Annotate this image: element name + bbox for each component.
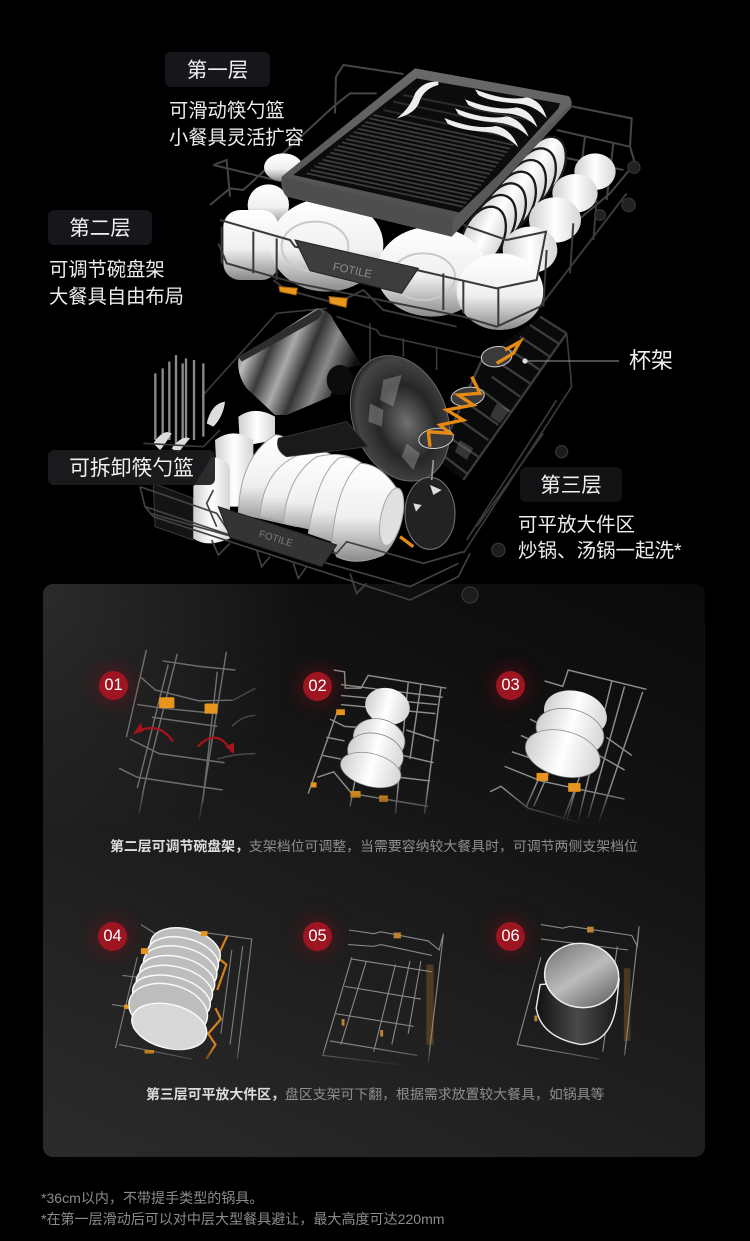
upper rack with sliding tray illustration — [210, 65, 640, 330]
footnotes: *在第一层滑动后可以对中层大型餐具避让，最大高度可达220mm — [41, 1211, 444, 1227]
text: layer three description: 炒锅、汤锅一起洗* — [518, 540, 682, 562]
wok — [332, 341, 468, 496]
tag: layer two: 第二层 — [69, 217, 131, 240]
wok handle — [278, 422, 368, 457]
badge 03: 03 — [501, 676, 520, 694]
panel: adjustment steps — [43, 584, 705, 1157]
tag: layer one: 第一层 — [187, 59, 248, 82]
wine glasses on rack — [417, 345, 513, 451]
tag: removable cutlery basket — [48, 450, 215, 485]
text: layer three description: 可平放大件区 — [518, 514, 635, 536]
badge 02: 02 — [308, 677, 327, 695]
badge 05: 05 — [308, 927, 327, 945]
tag: layer three — [520, 467, 622, 502]
badge 04: 04 — [103, 927, 122, 945]
badge 01 — [99, 671, 128, 700]
caption: second layer: 第二层可调节碗盘架，支架档位可调整，当需要容纳较大餐具时，可调节两侧支架档位 — [110, 838, 638, 854]
label: cup rack: 杯架 — [629, 348, 673, 373]
badge 06: 06 — [501, 927, 520, 945]
wheels — [595, 161, 640, 220]
plate stack right — [452, 130, 575, 274]
tag: layer two — [48, 210, 152, 245]
cup rack shelf — [437, 317, 567, 480]
spoons — [397, 82, 547, 147]
step 05 illustration — [323, 930, 443, 1065]
badge 05 — [303, 922, 332, 951]
grill bars — [307, 115, 513, 207]
chopstick basket — [143, 355, 225, 540]
footnotes — [41, 1190, 444, 1227]
text: layer two description: 大餐具自由布局 — [49, 286, 184, 308]
large bowl middle — [377, 227, 487, 317]
text: layer two description: 可调节碗盘架 — [49, 260, 165, 281]
step 03 illustration — [490, 670, 646, 832]
badge 06 — [496, 922, 525, 951]
text: layer one description: 小餐具灵活扩容 — [169, 128, 304, 148]
text: layer three description — [518, 514, 682, 562]
tag: layer one — [165, 52, 270, 87]
badge 04 — [98, 922, 127, 951]
step 06 illustration — [517, 925, 639, 1059]
panel glow — [43, 584, 303, 824]
orange clips — [279, 287, 347, 307]
right row of cups — [503, 153, 616, 273]
badge 03 — [496, 671, 525, 700]
text: layer two description — [49, 259, 184, 308]
upper rack front wires — [218, 193, 627, 327]
lower rack illustration — [140, 308, 572, 603]
caption: third layer: 第三层可平放大件区，盘区支架可下翻，根据需求放置较大餐具，如锅具等 — [146, 1086, 604, 1102]
wine glass large — [405, 460, 455, 549]
stock pot — [238, 308, 362, 415]
cutlery tray — [281, 68, 572, 237]
lower rack wheels — [462, 446, 568, 603]
large bowl left — [270, 198, 383, 292]
stacked bowls — [238, 435, 408, 561]
step 04 illustration — [112, 921, 252, 1059]
white cups — [193, 411, 275, 543]
cup rack callout line — [522, 358, 619, 364]
tag: layer three: 第三层 — [540, 474, 602, 497]
logo bar lower — [218, 507, 337, 567]
tag: removable cutlery basket: 可拆卸筷勺篮 — [69, 457, 194, 480]
footnotes: *36cm以内，不带提手类型的锅具。 — [41, 1190, 263, 1206]
orange supports — [400, 342, 520, 547]
badge 02 — [303, 672, 332, 701]
red arrows — [137, 728, 232, 752]
logo bar: FOTILE — [332, 261, 373, 281]
logo bar lower: FOTILE — [257, 529, 294, 550]
back cups — [223, 153, 303, 280]
lower rack back wires — [202, 308, 572, 553]
logo bar — [295, 240, 418, 293]
orange clips — [159, 697, 218, 714]
text: layer one description: 可滑动筷勺篮 — [169, 101, 285, 122]
upper rack back wires — [210, 65, 635, 288]
badge 01: 01 — [104, 676, 123, 694]
lower rack front wires — [140, 487, 470, 600]
text: layer one description — [169, 100, 304, 148]
large bowl lower right — [457, 253, 543, 330]
step 01 illustration — [119, 650, 255, 821]
step 02 illustration — [308, 670, 446, 814]
